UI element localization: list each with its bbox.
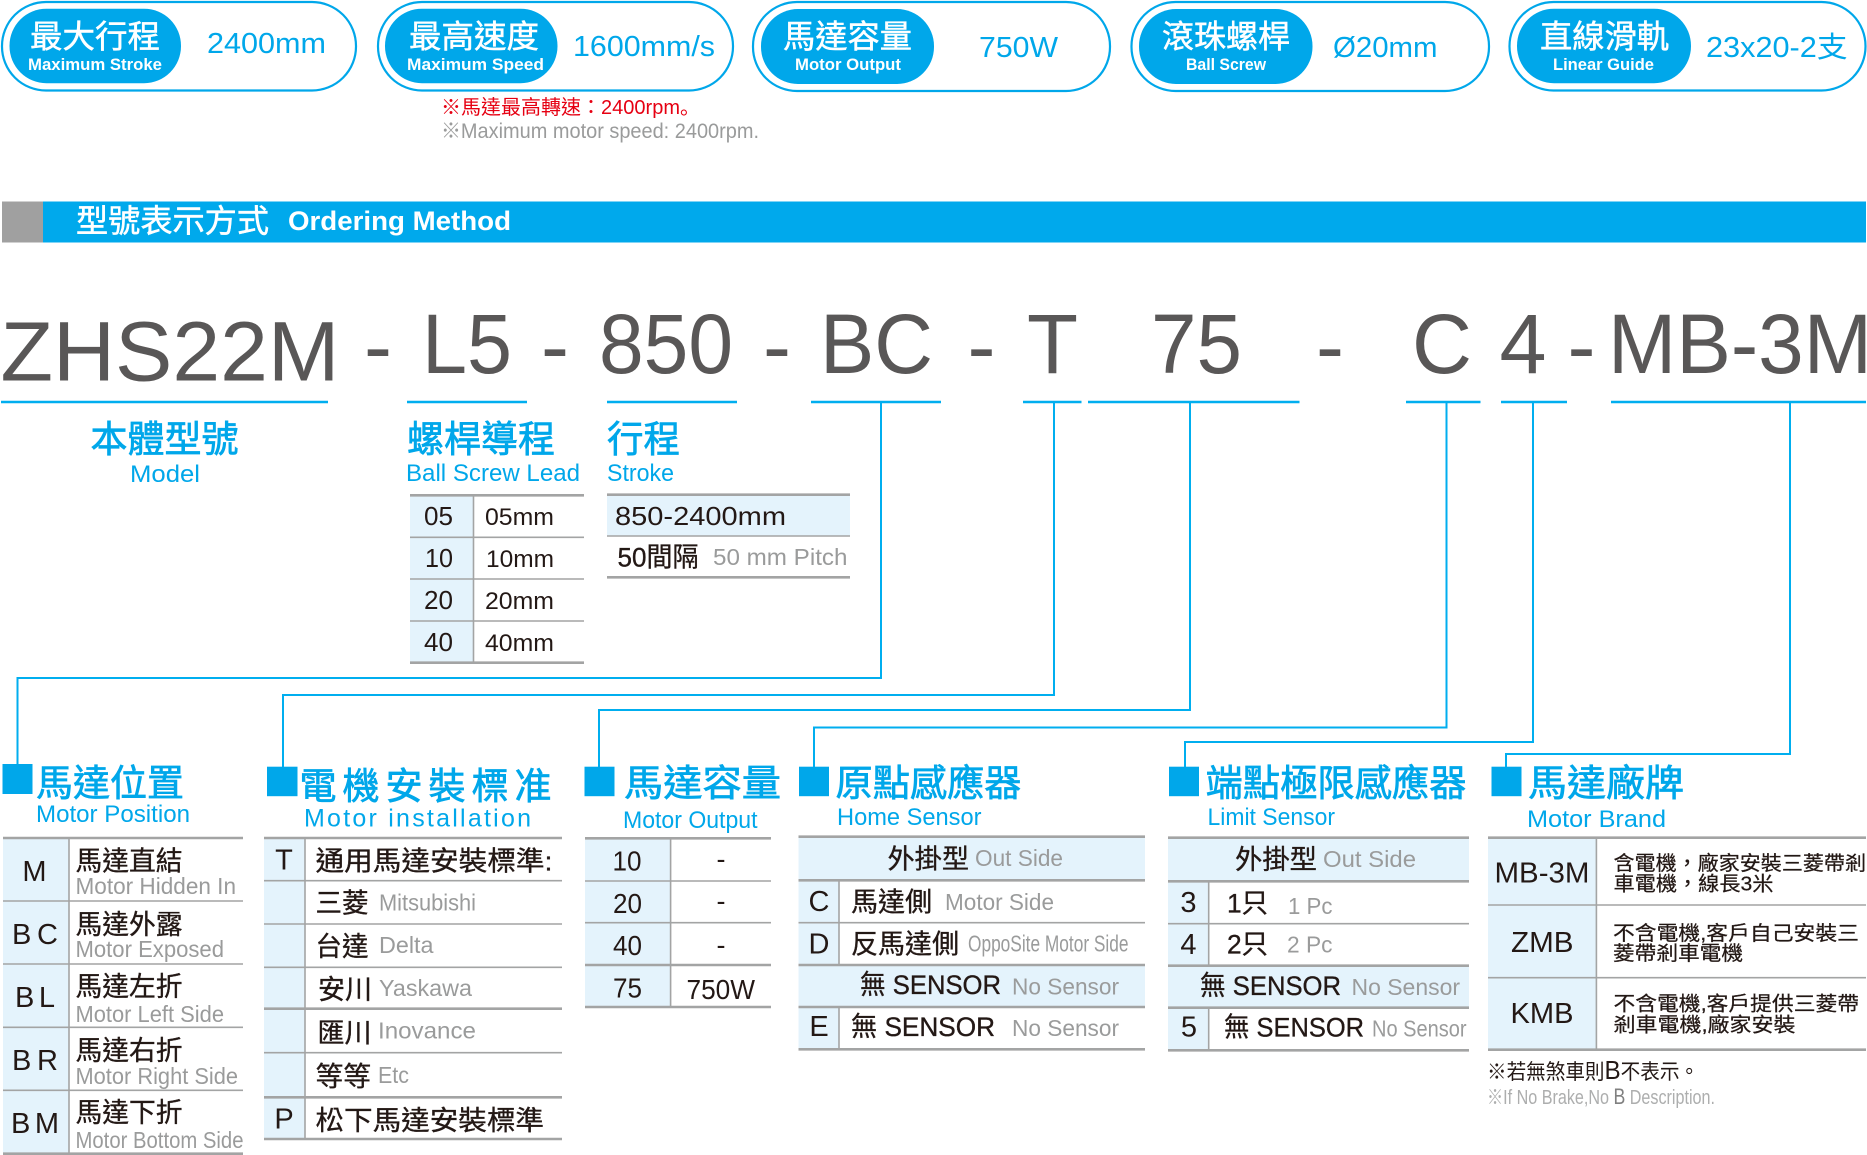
label: model: Model	[130, 461, 200, 488]
panel: stroke: 50間隔	[618, 542, 698, 572]
panel: motor installation: 通用馬達安裝標準:	[316, 846, 552, 876]
panel: limit sensor: 1 Pc	[1288, 893, 1332, 919]
motor speed note: ※Maximum motor speed: 2400rpm.	[441, 120, 759, 143]
panel: motor brand: 車電機，線長3米	[1614, 868, 1774, 896]
spec pill: maximum stroke	[2, 2, 356, 90]
connector lines from code to option tables	[18, 402, 1790, 768]
panel: home sensor	[798, 763, 1145, 1049]
panel: home sensor: 無 SENSOR	[860, 970, 1001, 1000]
spec pill: motor output: 750W	[979, 32, 1059, 64]
panel: motor output: 馬達容量	[624, 763, 781, 804]
panel: ball screw lead: 20	[424, 585, 453, 615]
panel: motor position	[2, 763, 244, 1154]
panel: limit sensor: 5	[1181, 1012, 1197, 1044]
panel: motor installation: Inovance	[378, 1018, 476, 1044]
spec pill: maximum speed: 1600mm/s	[573, 31, 715, 63]
panel: motor installation: 松下馬達安裝標準	[316, 1106, 544, 1136]
model code string: ZHS22M	[0, 304, 340, 398]
panel: motor installation: 等等	[316, 1062, 371, 1092]
panel: motor installation	[264, 766, 562, 1139]
panel: ball screw lead: 螺桿導程	[407, 419, 555, 460]
spec pill: linear guide: Linear Guide	[1553, 55, 1654, 74]
panel: motor brand	[1488, 763, 1866, 1050]
panel: home sensor: No Sensor	[1012, 1015, 1119, 1041]
model code string: L5	[422, 297, 512, 391]
panel: home sensor: Home Sensor	[837, 804, 982, 831]
panel: motor position: Motor Position	[36, 801, 190, 828]
model code string: C	[1412, 297, 1472, 391]
panel: motor brand: 馬達廠牌	[1528, 763, 1684, 804]
model code string: 850	[599, 297, 733, 391]
panel: limit sensor: 3	[1180, 887, 1197, 919]
panel: ball screw lead: 20mm	[485, 588, 554, 615]
panel: home sensor: 馬達側	[851, 888, 932, 918]
panel: motor installation: 匯川	[318, 1018, 372, 1048]
code underlines	[1, 401, 1866, 403]
model code string: BC	[820, 297, 933, 391]
model code string: -	[1568, 299, 1595, 393]
panel: motor position: 馬達直結	[76, 846, 182, 876]
panel: home sensor: E	[809, 1011, 829, 1043]
panel: motor installation: T	[275, 844, 293, 876]
panel: motor output: 10	[612, 846, 642, 876]
section banner: ordering method: Ordering Method	[288, 206, 511, 236]
panel: motor position: 馬達左折	[76, 972, 182, 1002]
panel: motor brand: ZMB	[1511, 927, 1574, 959]
panel: ball screw lead: Ball Screw Lead	[406, 460, 580, 487]
panel: limit sensor: 4	[1180, 929, 1197, 961]
model code string: -	[1316, 299, 1344, 393]
panel: motor installation: Delta	[379, 932, 434, 958]
panel: stroke: Stroke	[607, 460, 674, 487]
model code string: -	[968, 299, 995, 393]
model code string	[0, 297, 1867, 398]
panel: stroke: 850-2400mm	[615, 501, 786, 531]
panel: motor installation: 電機安裝標准	[300, 766, 552, 807]
section banner: ordering method	[2, 202, 1866, 242]
panel: motor position: Motor Left Side	[76, 1001, 224, 1027]
panel: home sensor: Out Side	[975, 845, 1063, 871]
panel: home sensor: 外掛型	[888, 844, 969, 874]
spec pill: maximum speed: 最高速度	[409, 18, 539, 54]
panel: limit sensor: Out Side	[1323, 846, 1416, 872]
panel: ball screw lead: 10mm	[486, 546, 554, 573]
spec pill: motor output: 馬達容量	[783, 18, 912, 54]
spec pill: maximum stroke: 最大行程	[30, 18, 160, 54]
panel: home sensor: Motor Side	[945, 889, 1054, 915]
panel: motor position: 馬達右折	[76, 1036, 182, 1066]
model code string: -	[541, 299, 569, 393]
panel: motor brand: 菱帶剎車電機	[1613, 942, 1743, 965]
panel: motor output: -	[716, 930, 726, 960]
model code string: -	[763, 299, 791, 393]
panel: motor brand: 不含電機,客戶提供三菱帶	[1614, 992, 1859, 1016]
panel: motor brand: 含電機，廠家安裝三菱帶剎	[1614, 847, 1866, 876]
spec pill: maximum speed: Maximum Speed	[407, 55, 544, 74]
panel: motor brand: MB-3M	[1494, 858, 1590, 890]
panel: motor position: Motor Right Side	[76, 1063, 238, 1089]
spec pill: ball screw: 滾珠螺桿	[1162, 18, 1290, 54]
panel: ball screw lead	[406, 419, 584, 663]
panel: limit sensor	[1168, 763, 1469, 1050]
panel: home sensor: C	[809, 886, 829, 918]
panel: motor installation: Mitsubishi	[379, 890, 476, 916]
panel: motor brand: 剎車電機,廠家安裝	[1614, 1012, 1796, 1036]
panel: motor output: -	[716, 844, 726, 874]
panel: limit sensor: No Sensor	[1372, 1016, 1467, 1042]
motor speed note	[441, 91, 759, 143]
panel: home sensor: D	[809, 928, 829, 960]
panel: motor position: M	[22, 856, 47, 888]
panel: motor brand: KMB	[1510, 998, 1574, 1030]
spec pill: motor output	[753, 2, 1110, 91]
panel: motor output: Motor Output	[623, 807, 758, 834]
panel: limit sensor: 1只	[1227, 888, 1268, 918]
spec pill: ball screw: Ø20mm	[1333, 32, 1438, 64]
spec pill: linear guide: 23x20-2支	[1706, 31, 1848, 64]
panel: motor installation: 安川	[318, 975, 372, 1005]
panel: motor installation: Yaskawa	[379, 975, 472, 1001]
panel: motor installation: Etc	[378, 1062, 409, 1088]
brake footnote	[1487, 1055, 1715, 1109]
brake footnote: ※If No Brake,No B Description.	[1487, 1084, 1715, 1109]
panel: motor position: Motor Hidden In	[76, 873, 236, 899]
panel: motor position: Motor Exposed	[76, 936, 224, 962]
panel: ball screw lead: 10	[425, 543, 453, 573]
panel: motor installation: Motor installation	[304, 804, 531, 832]
panel: motor position: 馬達外露	[76, 910, 182, 940]
model code string: 4	[1500, 297, 1546, 391]
spec pill: ball screw: Ball Screw	[1186, 55, 1267, 74]
panel: limit sensor: 外掛型	[1235, 845, 1317, 875]
panel: motor position: BC	[12, 919, 58, 951]
panel: home sensor: No Sensor	[1012, 974, 1119, 1000]
panel: limit sensor: No Sensor	[1352, 974, 1460, 1000]
panel: limit sensor: 2 Pc	[1287, 932, 1332, 958]
label: model	[90, 419, 238, 488]
panel: stroke: 50 mm Pitch	[713, 544, 848, 570]
brake footnote: ※若無煞車則B不表示。	[1487, 1055, 1699, 1086]
panel: stroke	[607, 419, 850, 577]
panel: motor output: 20	[613, 888, 642, 919]
label: model: 本體型號	[90, 419, 238, 460]
panel: limit sensor: 無 SENSOR	[1200, 971, 1341, 1001]
panel: motor output: 750W	[686, 974, 756, 1005]
panel: motor output: 40	[613, 930, 642, 961]
panel: motor installation: 台達	[316, 932, 368, 962]
panel: motor position: BR	[12, 1045, 58, 1077]
panel: motor brand: 不含電機,客戶自己安裝三	[1613, 922, 1859, 945]
panel: limit sensor: 2只	[1227, 930, 1268, 960]
panel: motor position: Motor Bottom Side	[76, 1127, 244, 1153]
panel: ball screw lead: 40	[424, 627, 453, 657]
model code string: 75	[1151, 297, 1242, 391]
panel: ball screw lead: 05mm	[485, 504, 554, 531]
spec pill: linear guide	[1510, 2, 1866, 90]
spec pill: maximum stroke: Maximum Stroke	[28, 55, 162, 74]
spec pill: maximum stroke: 2400mm	[207, 28, 326, 60]
panel: stroke: 行程	[607, 419, 680, 460]
panel: motor output: 75	[613, 972, 642, 1004]
panel: home sensor: 反馬達側	[851, 930, 959, 960]
spec pill: linear guide: 直線滑軌	[1540, 18, 1669, 54]
panel: motor position: BL	[15, 982, 55, 1014]
panel: motor output: -	[716, 886, 726, 916]
spec pill: maximum speed	[378, 2, 733, 90]
panel: home sensor: 無 SENSOR	[851, 1012, 995, 1042]
spec pill: motor output: Motor Output	[795, 55, 901, 74]
panel: motor output	[584, 763, 781, 1007]
model code string: -	[364, 299, 392, 393]
panel: home sensor: OppoSite Motor Side	[968, 930, 1128, 956]
panel: motor position: 馬達位置	[36, 763, 184, 804]
spec pill: ball screw	[1132, 2, 1489, 91]
motor speed note: ※馬達最高轉速：2400rpm。	[441, 91, 700, 120]
section banner: ordering method: 型號表示方式	[76, 203, 269, 239]
panel: motor installation: 三菱	[316, 888, 368, 918]
panel: home sensor: 原點感應器	[836, 763, 1022, 804]
panel: motor position: 馬達下折	[76, 1098, 182, 1128]
panel: limit sensor: 端點極限感應器	[1206, 763, 1466, 804]
panel: ball screw lead: 40mm	[485, 630, 554, 657]
panel: limit sensor: Limit Sensor	[1208, 804, 1335, 831]
panel: motor position: BM	[11, 1108, 59, 1140]
panel: motor installation: P	[274, 1104, 294, 1136]
panel: ball screw lead: 05	[424, 501, 453, 531]
panel: motor brand: Motor Brand	[1527, 806, 1666, 833]
panel: limit sensor: 無 SENSOR	[1224, 1012, 1364, 1042]
model code string: T	[1027, 297, 1078, 391]
